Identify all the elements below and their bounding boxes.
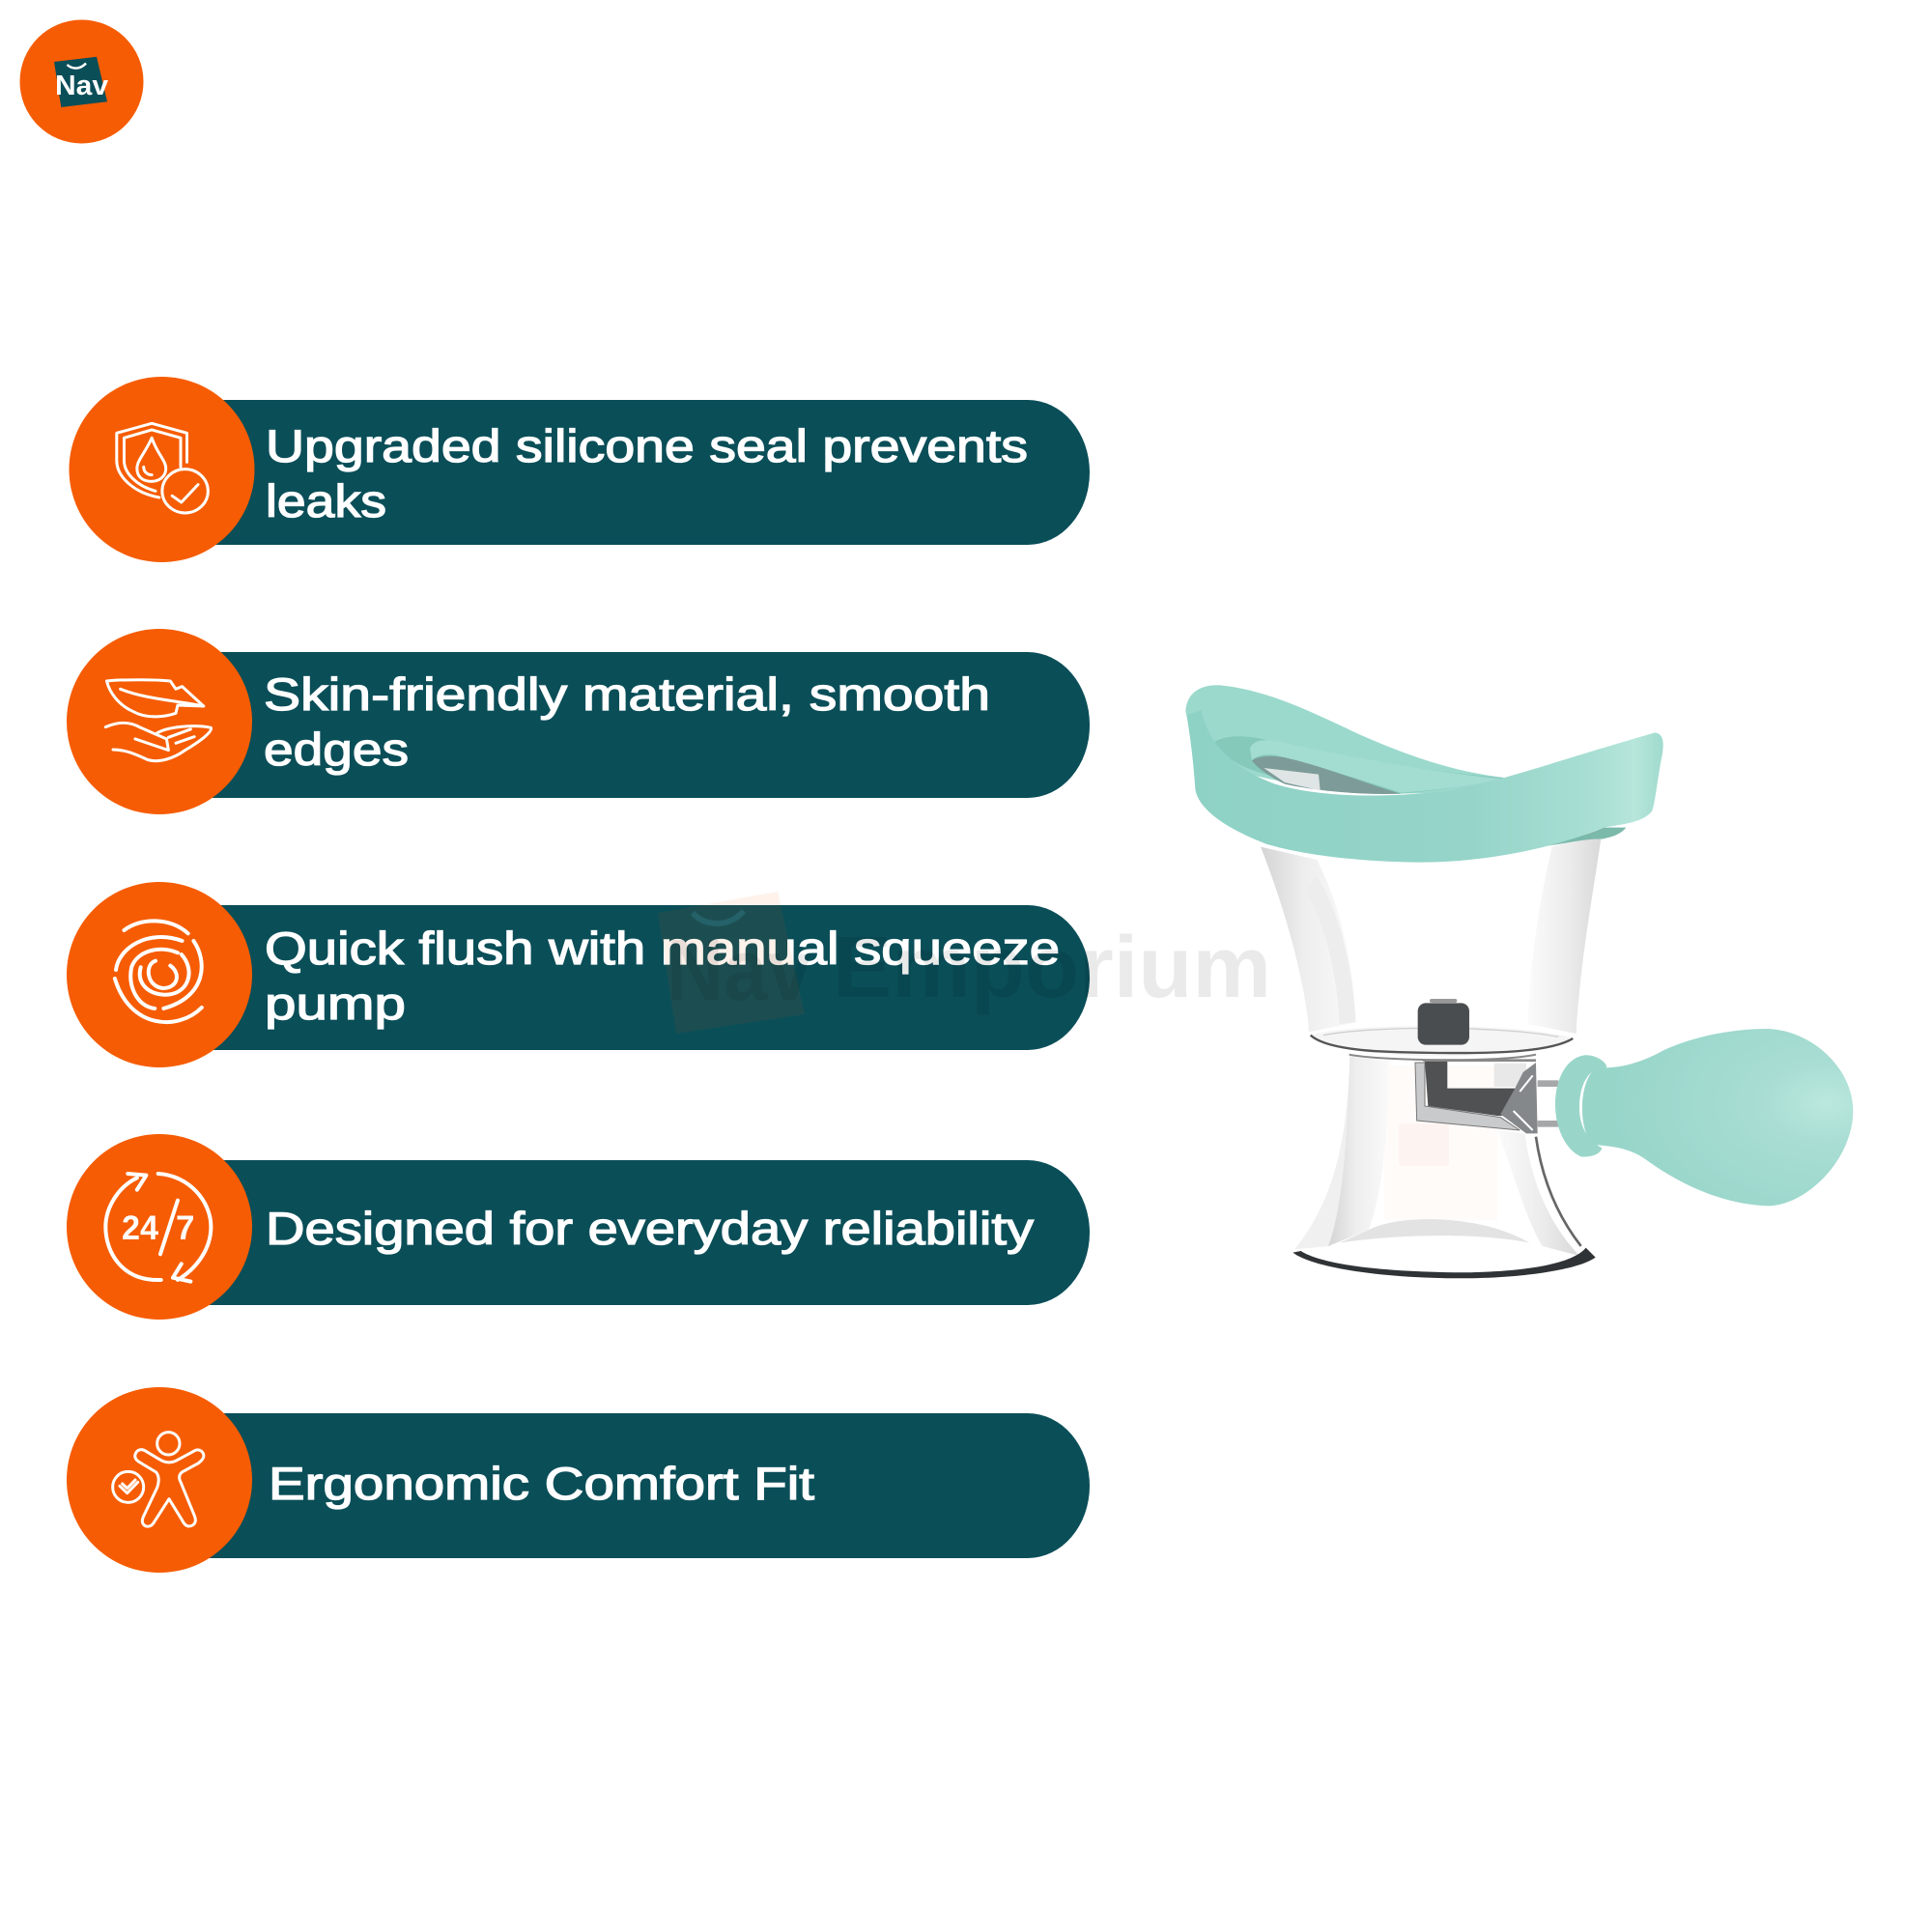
metal bracket — [1415, 1061, 1558, 1133]
watermark: Nav Emporium: Nav — [667, 923, 811, 1019]
feature 2: skin-friendly — [67, 629, 1090, 814]
icon: feather over hand — [105, 680, 212, 761]
watermark: Nav Emporium — [658, 892, 1271, 1034]
feature 1: silicone seal — [70, 377, 1090, 562]
base ring — [1293, 1248, 1596, 1278]
logo badge — [19, 19, 143, 143]
lower glass cup — [1293, 1056, 1596, 1278]
feature 2 text: edges — [264, 724, 409, 775]
feature 4 text: Designed for everyday reliability — [266, 1203, 1035, 1254]
logo badge: Nav — [55, 71, 108, 101]
squeeze bulb — [1555, 1029, 1853, 1206]
icon: 24/7: 7 — [176, 1209, 194, 1247]
front band of rim — [1186, 710, 1663, 863]
upper glass cup — [1261, 833, 1602, 1034]
notch under rim — [1539, 828, 1626, 847]
icon: 24/7: 24 — [122, 1209, 159, 1247]
product illustration: flush cup with squeeze bulb — [1185, 685, 1853, 1278]
silicone rim — [1185, 685, 1663, 863]
glass disc and ring — [1311, 999, 1573, 1133]
icon: shield with drop and check — [117, 423, 208, 513]
feature 4: everyday reliability — [67, 1134, 1090, 1320]
feature 3 text — [265, 923, 1060, 1029]
feature 1 text: leaks — [266, 475, 386, 526]
feature 2 text: Skin-friendly material, smooth — [264, 668, 990, 720]
icon: person with check — [113, 1433, 204, 1526]
feature 2 text — [264, 668, 990, 775]
feature 1 text — [266, 420, 1028, 526]
feature 3: quick flush — [67, 882, 1090, 1067]
feature 3 text: pump — [265, 978, 406, 1029]
feature 3 text: Quick flush with manual squeeze — [265, 923, 1060, 974]
icon: swirl — [115, 921, 202, 1022]
icon: 24/7 — [105, 1174, 211, 1282]
feature 5: comfort fit — [67, 1387, 1090, 1573]
watermark: Nav Emporium: Emporium — [833, 920, 1271, 1016]
valve cap — [1418, 999, 1469, 1045]
feature 1 text: Upgraded silicone seal prevents — [266, 420, 1028, 471]
feature 5 text: Ergonomic Comfort Fit — [269, 1458, 814, 1509]
